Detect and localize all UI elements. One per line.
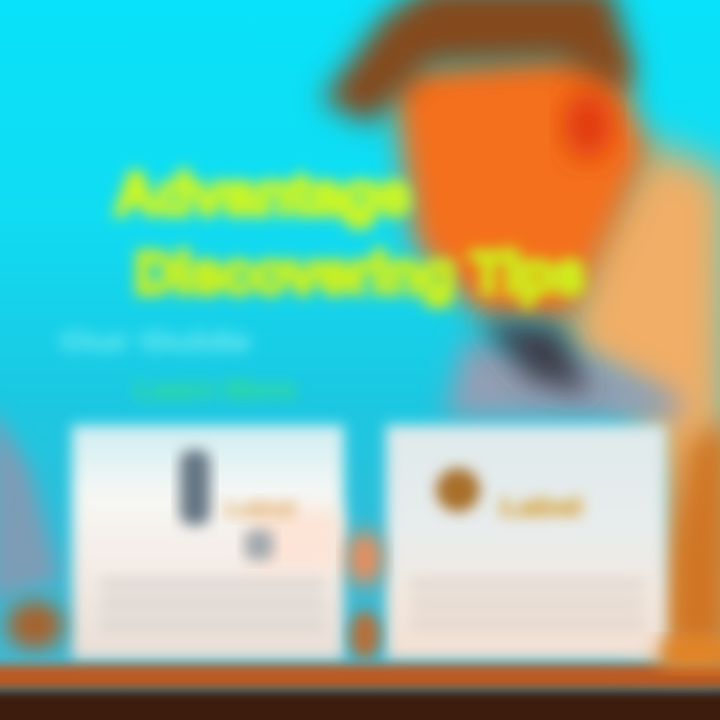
card label: Label [225,499,295,519]
shirt [445,340,680,418]
forearm shade [665,420,720,650]
panel: right card [386,425,666,660]
hair [322,0,635,125]
title line 1: Advantage [115,162,410,227]
small brown object left [7,601,63,649]
table [0,640,720,720]
card label: Label [500,494,582,521]
icon: figure [180,450,210,525]
small brown object centre [350,611,380,659]
orange accent between cards [347,530,383,586]
beard [480,320,590,395]
subtitle: Our Guide [60,326,250,356]
card warm glow [250,510,340,570]
person illustration [322,0,720,660]
title [115,162,585,306]
icon: medal [436,468,480,512]
title line 2: Discovering Tips [135,241,585,306]
face [390,50,650,320]
ear [564,91,612,159]
card body text [100,580,325,629]
left figure arm [0,405,60,600]
shoulder and arm [560,140,720,660]
icon: small figure [245,530,273,560]
green label: Learn More [135,374,295,404]
card body text [410,580,645,629]
panel: left card [72,425,344,660]
